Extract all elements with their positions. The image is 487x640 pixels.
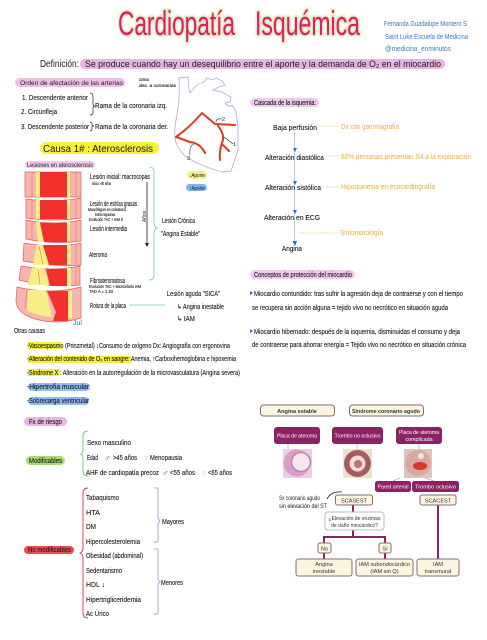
lesion labels: Estrías migueanas [95, 212, 115, 217]
ischemia cascade flow: 80% personas presentan S4 a la exploración [341, 154, 471, 161]
otras causas: -Vasoespasmo (Prinzmetal) ↓Consumo de oxígeno Dx: Angiografía con ergonovina [27, 343, 230, 350]
ischemia cascade flow: Hipoquinesia en ecocardiografía [341, 184, 435, 191]
acute lesion [129, 291, 224, 323]
modifiable factors: ♀ [143, 453, 150, 463]
ischemia cascade flow: Angina [282, 246, 302, 253]
flowchart: acute coronary syndrome [260, 405, 459, 576]
lesion labels: Ateroma [89, 252, 107, 259]
otras causas: -Alteración del contenido de O₂ en sangre: Anemia, ↑Carboxihemoglobina e hipoxemia [27, 356, 236, 363]
otras causas [14, 328, 240, 405]
lesion labels: Lesión inicial: macrocopas [90, 174, 150, 181]
lesion labels: Evolución TAC + Microinfarto IAM [89, 284, 141, 289]
acute lesion: ↳ IAM [177, 315, 195, 323]
list of arteries: 3. Descendente posterior [21, 124, 90, 131]
connector lines [323, 505, 438, 559]
modifiable factors: Menopausia [150, 455, 182, 462]
modifiable factors: ♂ [104, 453, 111, 463]
header: angina estable [260, 405, 334, 416]
concept: stunned myocardium: se recupera sin acción alguna = tejido vivo no necrótico en situación aguda [252, 305, 448, 312]
otras causas: Otras causas [14, 328, 45, 335]
label: increased supply [186, 184, 207, 192]
concept: hibernating myocardium: Miocardio hibernado: después de la isquemia, disminuidas el consumo y deja [254, 329, 460, 336]
lesion labels: Lesión intermedia [90, 226, 127, 233]
definition: Definición: [40, 59, 79, 70]
image: stable plaque [283, 449, 312, 478]
box: trombo no oclusivo [332, 427, 383, 444]
icon: heart with coronary arteries: 2 [222, 117, 225, 123]
modifiable factors: Modificables [29, 458, 62, 465]
header: sindrome coronario agudo: Síndrome coronario agudo [352, 409, 421, 415]
list of arteries: 2. Circunfleja [21, 109, 57, 116]
list of arteries: Rama de la coronaria izq. [95, 103, 167, 110]
non-modifiable factors: Obesidad (abdominal) [86, 553, 143, 560]
acute lesion: Lesión aguda "SICA" [167, 291, 220, 298]
box: IAM subendocardico [356, 559, 413, 576]
box: IAM transmural: transmural [425, 569, 451, 575]
ischemia cascade flow: Alteración diastólica [265, 155, 324, 162]
question box: de daño miocárdico? [331, 523, 378, 529]
box: SCACEST [420, 495, 456, 505]
heading: cascada de la isquemia [250, 98, 319, 107]
signature: Jul [73, 320, 82, 327]
author credits: Fernanda Guadalupe Montero S [384, 21, 467, 28]
definition: Se produce cuando hay un desequilibrio entre el aporte y la demanda de O₂ en el miocardio [85, 59, 441, 69]
heading: orden de afectación: Orden de afectación de las arterias [20, 80, 124, 87]
heading: factores de riesgo [24, 417, 67, 426]
box: IAM transmural: IAM [433, 562, 443, 568]
box: SCACEST: SCACEST [425, 498, 452, 504]
box: SCASEST [336, 495, 372, 505]
modifiable factors: ♀ [201, 468, 208, 478]
title: Isquémica [255, 5, 360, 43]
icon: heart with coronary arteries: 1 [233, 142, 236, 148]
list of arteries [21, 93, 168, 131]
lesion labels: Inicio >30 años [92, 181, 111, 186]
non-modifiable factors [24, 488, 184, 618]
lesion labels: Fibroateromatosa [90, 278, 125, 285]
box: pared arterial: Pared arterial [378, 484, 408, 490]
modifiable factors: >45 años [113, 455, 137, 462]
box: trombo no oclusivo: Trombo no oclusivo [334, 434, 380, 440]
ischemia cascade flow: Alteración sistólica [265, 185, 321, 192]
box: IAM transmural [417, 559, 459, 576]
concept: hibernating myocardium [250, 329, 466, 349]
box: angina inestable: inestable [313, 569, 335, 575]
heading: conceptos [250, 270, 355, 279]
heading: causa 1: Causa 1# : Aterosclerosis [43, 144, 153, 155]
box: pared arterial [375, 481, 411, 492]
modifiable factors: <65 años [208, 470, 232, 477]
box: IAM subendocardico: IAM subendocárdico [359, 562, 410, 568]
modifiable factors: Edad [87, 455, 98, 462]
lesion labels: Evolución TAC + IAM S [89, 217, 123, 222]
label: decreased supply: ↓Aporte [189, 173, 205, 179]
modifiable factors: <55 años [170, 470, 195, 477]
box: angina inestable: Angina [315, 562, 334, 568]
non-modifiable factors: No modificables [28, 547, 71, 554]
box: placa de ateroma: Placa de ateroma [277, 434, 317, 440]
box: trombo oclusivo [412, 481, 459, 492]
ischemia cascade flow: Dx con gammagrafía [341, 124, 399, 131]
list of arteries: 1. Descendente anterior [22, 95, 89, 102]
title: Cardiopatía [118, 5, 235, 43]
non-modifiable factors: HTA [86, 510, 100, 517]
handwritten note: SCASEST: sin elevación del ST [279, 504, 327, 510]
box: placa complicada [396, 427, 442, 444]
lesion labels: Lesión de estrías grasas [90, 201, 137, 208]
author credits: @medicina_enminutos [385, 46, 451, 53]
question box: ¿Elevación de enzimas [328, 516, 381, 522]
ischemia cascade flow: Baja perfusión [273, 125, 317, 132]
otras causas: -Síndrome X : Alteración en la autorregulación de la microvasculatura (Angina severa) [27, 370, 240, 377]
header: sindrome coronario agudo [350, 405, 424, 416]
box: no: No [321, 546, 328, 552]
non-modifiable factors: Ac Úrico [86, 609, 109, 618]
ischemia cascade flow: Alteración en ECG [264, 215, 320, 222]
note: comienza [139, 77, 177, 88]
non-modifiable factors: Hipertrigliceridemia [86, 597, 141, 604]
question box [325, 512, 384, 530]
title: Isquémica [255, 5, 360, 43]
modifiable factors: Sexo masculino [87, 440, 131, 447]
note: comienza: des. a coronarias [139, 83, 177, 88]
non-modifiable factors: HDL ↓ [86, 582, 105, 589]
box: SCASEST: SCASEST [341, 498, 368, 504]
list of arteries: Rama de la coronaria der. [95, 124, 168, 131]
lesion labels: TAD A = 1:40 [89, 289, 113, 294]
non-modifiable factors: Sedentarismo [86, 568, 122, 575]
acute lesion: ↳ Angina inestable [177, 303, 224, 311]
header: angina estable: Angina estable [277, 409, 317, 415]
non-modifiable factors: Mayores [162, 519, 184, 526]
teal brace: chronic lesion: "Angina Estable" [161, 231, 200, 238]
non-modifiable factors: Tabaquismo [86, 495, 119, 502]
box: placa de ateroma [274, 427, 320, 444]
handwritten note: SCASEST [279, 492, 342, 510]
modifiable factors [26, 431, 232, 478]
arrow: years of progression: Años [142, 211, 148, 222]
box: placa complicada: complicada [405, 437, 433, 443]
box: trombo oclusivo: Trombo oclusivo [415, 484, 456, 490]
title: Cardiopatía [118, 5, 235, 43]
box: no [318, 543, 331, 553]
artery cross-sections [16, 172, 81, 322]
label: decreased supply [187, 171, 207, 179]
ischemia cascade flow: Sintomatología [340, 230, 383, 237]
handwritten note: SCASEST: Sx coronario agudo [279, 496, 321, 502]
heading: lesiones: Lesiones en aterosclerosis [27, 163, 93, 169]
author credits [384, 21, 468, 53]
concept: stunned myocardium [250, 291, 463, 312]
otras causas: -Hipertrofia muscular [27, 384, 90, 391]
arrow: years of progression [142, 182, 149, 247]
heading: factores de riesgo: Fx de riesgo [29, 419, 62, 426]
non-modifiable factors: Hipercolesterolemia [86, 539, 140, 546]
non-modifiable factors: Menores [161, 580, 183, 587]
box: si: Sí [382, 546, 388, 552]
otras causas: -Sobrecarga ventricular [27, 398, 90, 405]
non-modifiable factors: DM [86, 524, 96, 531]
box: IAM subendocardico: (IAM sin Q) [370, 569, 399, 575]
image: complicated plaque [404, 449, 432, 478]
icon: heart with coronary arteries [175, 77, 238, 172]
modifiable factors: AHF de cardiopatía precoz [86, 470, 159, 477]
ischemia cascade flow [264, 124, 471, 253]
teal brace: chronic lesion: Lesión Crónica [162, 218, 195, 225]
modifiable factors: ♂ [162, 468, 169, 478]
lesion labels: Rotura de la placa [90, 303, 126, 310]
lesion labels [88, 174, 150, 310]
heading: conceptos: Conceptos de protección del miocardio [254, 272, 352, 279]
icon: heart with coronary arteries: 3 [187, 156, 190, 162]
teal brace: chronic lesion [149, 167, 200, 280]
box: si [379, 543, 391, 553]
label: increased supply: ↑Aporte [189, 186, 205, 192]
lesion labels: Macrófagos en colesterol [88, 207, 126, 212]
image: non-occlusive thrombus [343, 449, 372, 478]
author credits: Saint Luke Escuela de Medicina [385, 34, 468, 41]
note: comienza: Comienza [139, 77, 149, 82]
heading: cascada de la isquemia: Cascada de la isquemia: [254, 100, 316, 107]
box: angina inestable [296, 559, 352, 576]
box: placa complicada: Placa de ateroma [399, 430, 439, 436]
